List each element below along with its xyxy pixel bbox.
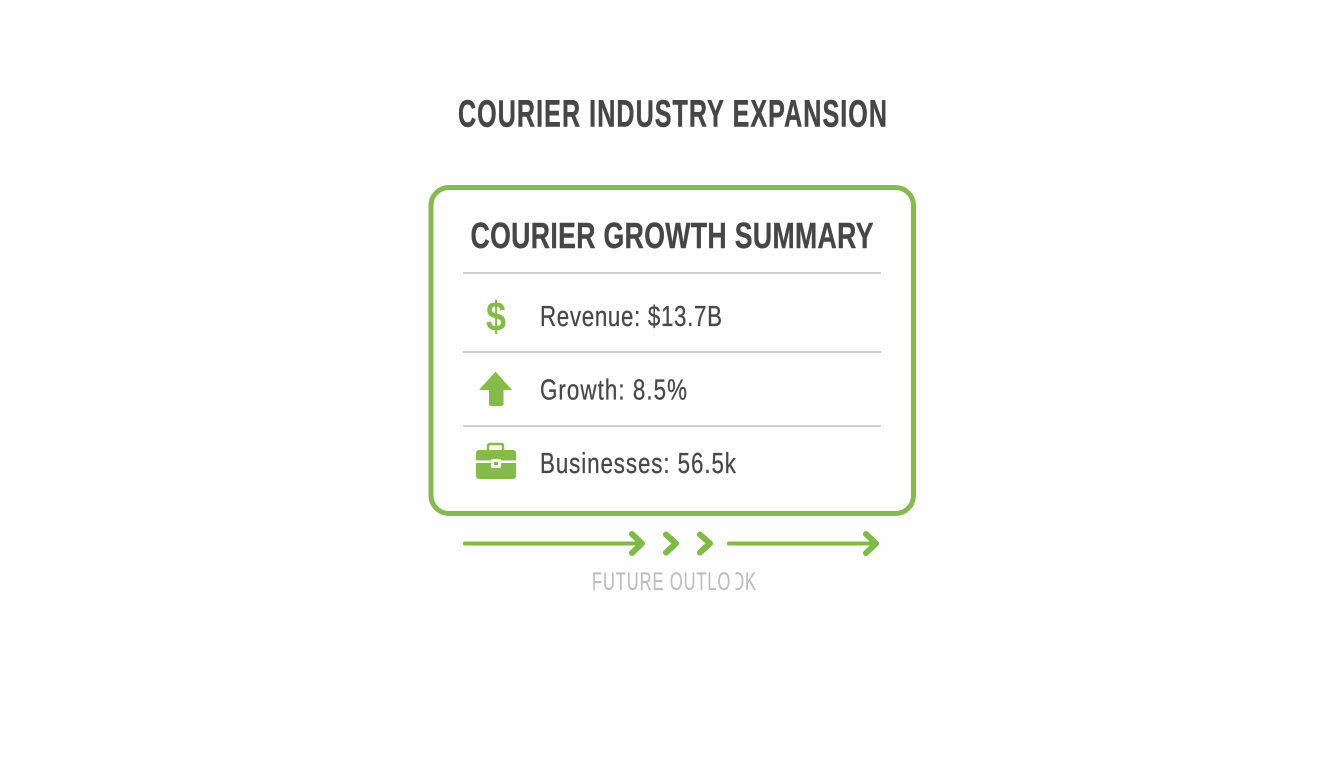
left arrow — [465, 534, 642, 553]
chevron two — [700, 534, 710, 552]
title: COURIER INDUSTRY EXPANSION — [458, 92, 887, 135]
right arrow — [729, 534, 876, 553]
icon: briefcase — [476, 444, 516, 479]
revenue text: Revenue: $13.7B — [540, 301, 722, 333]
arrow row: future outlook — [465, 534, 876, 553]
panel heading: COURIER GROWTH SUMMARY — [470, 215, 874, 256]
icon: up arrow — [480, 372, 511, 406]
future outlook label: FUTURE OUTLOOK — [592, 569, 756, 596]
panel: courier growth summary — [431, 188, 914, 514]
icon: dollar sign: $ — [486, 293, 506, 340]
panel border — [431, 188, 914, 514]
chevron one — [666, 534, 676, 552]
growth text: Growth: 8.5% — [540, 375, 687, 406]
businesses text: Businesses: 56.5k — [540, 448, 736, 480]
